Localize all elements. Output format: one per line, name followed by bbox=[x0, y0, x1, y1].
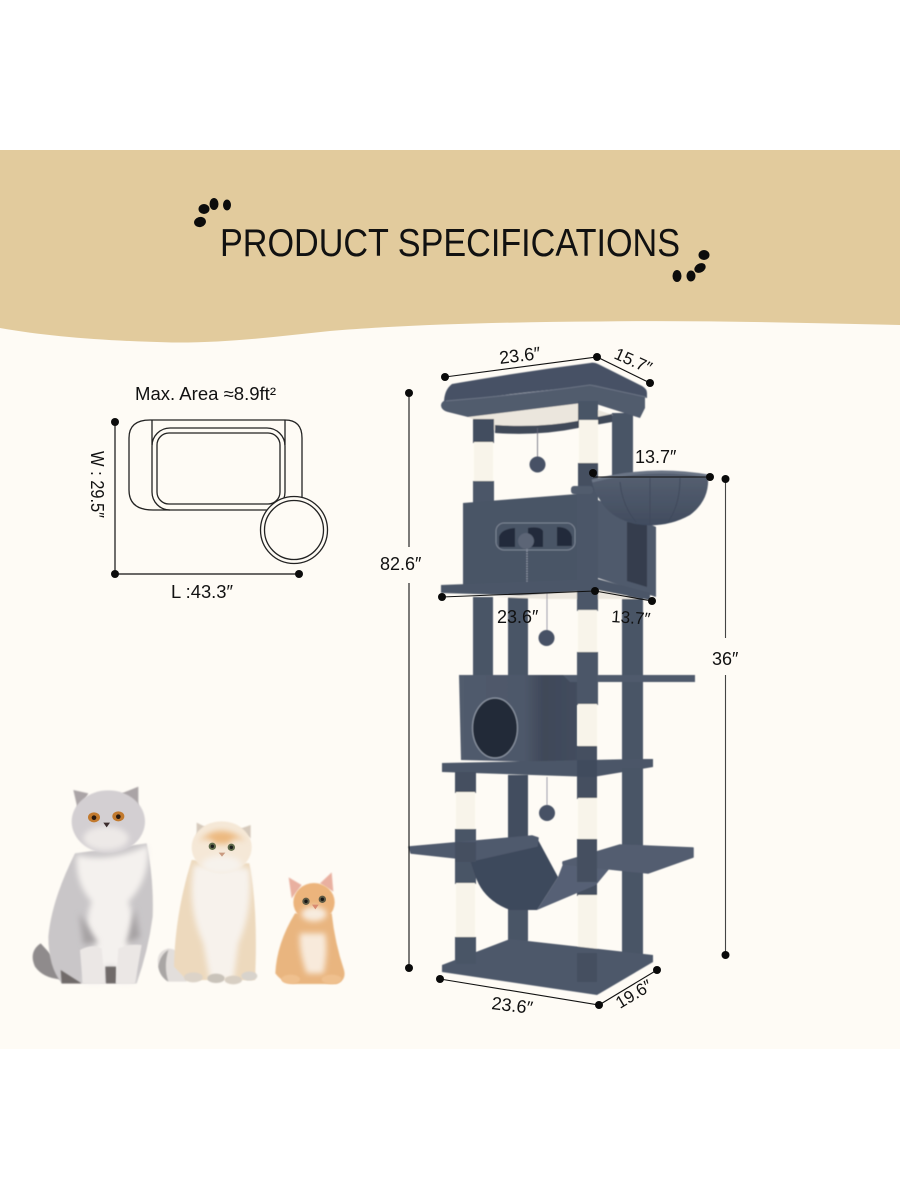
area label: Max. Area ≈8.9ft² bbox=[135, 384, 276, 404]
dimension labels: 13.7″ bbox=[611, 607, 651, 629]
dimension dots bbox=[405, 353, 730, 1009]
lower condo bbox=[459, 675, 577, 763]
title: PRODUCT SPECIFICATIONS bbox=[220, 222, 680, 265]
dimension lines bbox=[409, 357, 726, 1005]
footprint diagram bbox=[87, 384, 328, 602]
middle platform bbox=[442, 759, 653, 777]
ball: lower toy bbox=[539, 777, 555, 821]
hammock bbox=[470, 838, 610, 910]
width and length dimension lines bbox=[111, 418, 303, 578]
dimension labels bbox=[380, 343, 739, 1018]
right platform post bbox=[622, 768, 643, 846]
header band bbox=[0, 150, 900, 343]
cat tree bbox=[409, 363, 708, 995]
post E mid bbox=[508, 775, 528, 839]
dimension labels: 15.7″ bbox=[611, 344, 655, 378]
dimension labels: 13.7″ bbox=[635, 447, 677, 467]
left platform bbox=[409, 836, 538, 860]
dimension labels: 23.6″ bbox=[498, 343, 542, 368]
dimension labels: 23.6″ bbox=[497, 607, 539, 627]
dimension labels: 36″ bbox=[712, 649, 739, 669]
condo toy ball bbox=[518, 533, 534, 584]
length label: L :43.3″ bbox=[171, 582, 234, 602]
post A upper bbox=[473, 419, 494, 505]
dimension labels: 82.6″ bbox=[380, 554, 422, 574]
condo windows bbox=[496, 523, 575, 550]
cats group bbox=[33, 787, 345, 984]
top perch bbox=[441, 363, 647, 434]
width label: W : 29.5″ bbox=[87, 451, 107, 519]
cat: cream bbox=[158, 821, 257, 984]
condo door bbox=[627, 522, 647, 587]
basket bbox=[592, 472, 708, 525]
icon: paw dots right bbox=[672, 250, 710, 282]
ball: top toy bbox=[530, 428, 546, 472]
left lower post bbox=[455, 772, 476, 964]
condo side bbox=[598, 500, 656, 597]
condo platform bbox=[441, 579, 650, 600]
base bbox=[442, 939, 653, 995]
platform underside bbox=[495, 590, 640, 599]
post B full bbox=[571, 486, 598, 982]
condo front bbox=[463, 494, 577, 587]
rear posts bbox=[473, 413, 643, 957]
post B upper bbox=[578, 401, 598, 493]
dimension labels: 23.6″ bbox=[491, 993, 535, 1018]
dimension labels: 19.6″ bbox=[612, 976, 656, 1012]
redraw post over shelf bbox=[577, 675, 597, 683]
cat: orange kitten bbox=[275, 872, 345, 984]
lower condo hole bbox=[472, 698, 518, 758]
upper side shelf bbox=[563, 675, 695, 682]
right platform bbox=[563, 845, 693, 873]
icon: paw dots left bbox=[193, 198, 231, 228]
footprint outlines bbox=[129, 420, 328, 564]
ball: middle toy bbox=[538, 593, 554, 646]
cat: grey bbox=[33, 787, 153, 983]
cream background bbox=[0, 300, 900, 1049]
